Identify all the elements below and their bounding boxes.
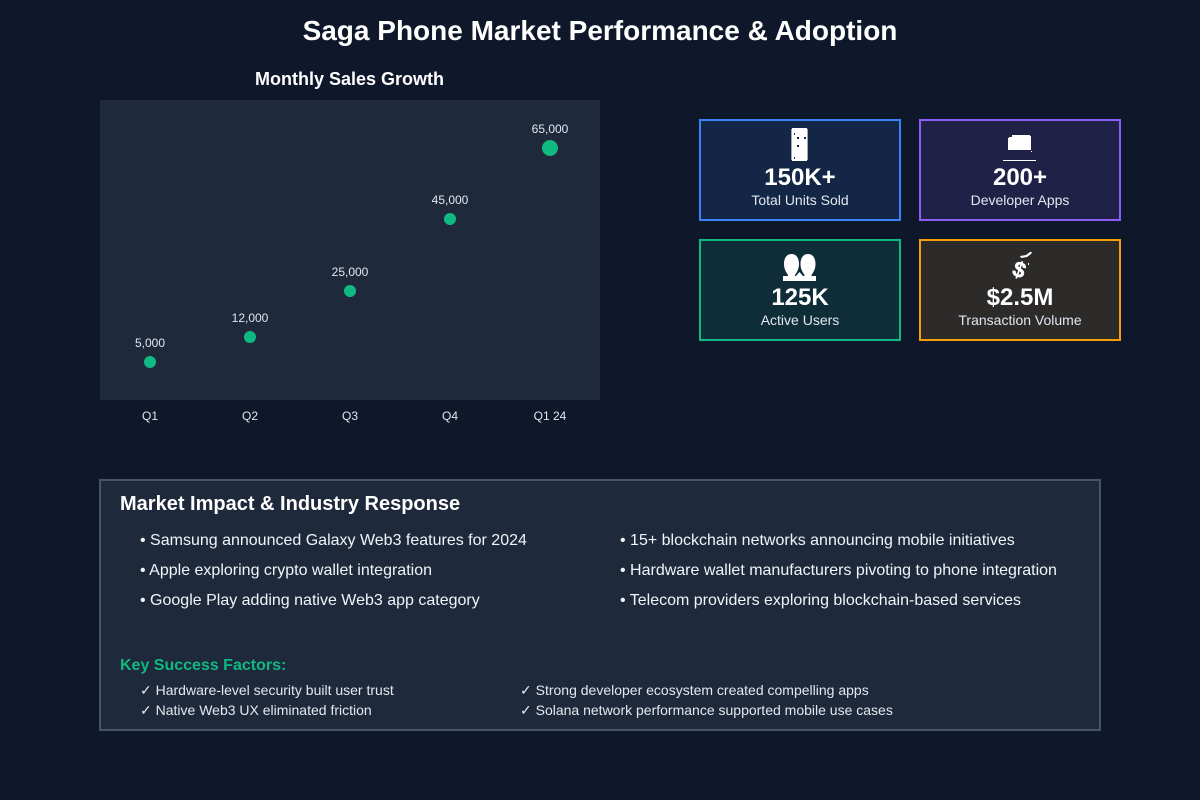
icon: phone [791, 128, 808, 161]
panel: transaction volume [919, 239, 1121, 341]
success factors: right: ✓ Solana network performance supported mobile use cases [520, 702, 893, 718]
data point: Q4: 45,000 [432, 193, 468, 207]
industry response bullets: right: • Hardware wallet manufacturers pivoting to phone integration [620, 562, 1057, 579]
success factors: left: ✓ Native Web3 UX eliminated friction [140, 702, 372, 718]
data point: Q1 24: 65,000 [532, 122, 568, 136]
industry response bullets: right: • 15+ blockchain networks announcing mobile initiatives [620, 532, 1015, 549]
key success factors heading: Key Success Factors: [120, 657, 286, 674]
industry response bullets: right: • Telecom providers exploring blockchain-based services [620, 592, 1021, 609]
chart background [100, 100, 600, 400]
success factors: left [140, 682, 394, 718]
title: Saga Phone Market Performance & Adoption [303, 15, 897, 46]
panel: total units sold: Total Units Sold [751, 192, 849, 208]
panel: developer apps [919, 119, 1121, 221]
chart heading: Monthly Sales Growth [255, 69, 444, 89]
success factors: right [520, 682, 893, 718]
data point: Q2: 12,000 [232, 311, 268, 325]
data point: Q3: Q3 [342, 409, 358, 423]
data point: Q4: Q4 [442, 409, 458, 423]
data point: Q1 24: Q1 24 [534, 409, 566, 423]
icon: laptop [1003, 135, 1036, 161]
data point: Q1: 5,000 [135, 336, 165, 350]
industry response bullets: left [140, 532, 527, 609]
panel: total units sold [699, 119, 901, 221]
industry response bullets: left: • Google Play adding native Web3 app category [140, 592, 480, 609]
industry response bullets: left: • Apple exploring crypto wallet integration [140, 562, 432, 579]
icon: users [783, 254, 816, 281]
panel heading: Market Impact & Industry Response [120, 493, 460, 515]
industry response bullets: left: • Samsung announced Galaxy Web3 features for 2024 [140, 532, 527, 549]
data point: Q4 [432, 193, 468, 423]
panel: active users: 125K [771, 284, 829, 311]
data point: Q3 [332, 265, 368, 423]
panel: active users: Active Users [761, 312, 839, 328]
data point: Q1 24 [532, 122, 568, 423]
data point: Q2 [232, 311, 268, 423]
panel: market impact and industry response [99, 479, 1101, 731]
panel: developer apps: Developer Apps [971, 192, 1069, 208]
data point: Q1 [135, 336, 165, 423]
panel: monthly sales growth chart [100, 69, 600, 423]
success factors: left: ✓ Hardware-level security built user trust [140, 682, 394, 698]
panel: transaction volume: $2.5M [987, 284, 1053, 311]
data point: Q1: Q1 [142, 409, 158, 423]
panel: transaction volume: Transaction Volume [958, 312, 1082, 328]
data point: Q3: 25,000 [332, 265, 368, 279]
panel: active users [699, 239, 901, 341]
panel: developer apps: 200+ [993, 164, 1047, 191]
industry response bullets: right [620, 532, 1057, 609]
panel: total units sold: 150K+ [764, 164, 836, 191]
data point: Q2: Q2 [242, 409, 258, 423]
success factors: right: ✓ Strong developer ecosystem created compelling apps [520, 682, 869, 698]
